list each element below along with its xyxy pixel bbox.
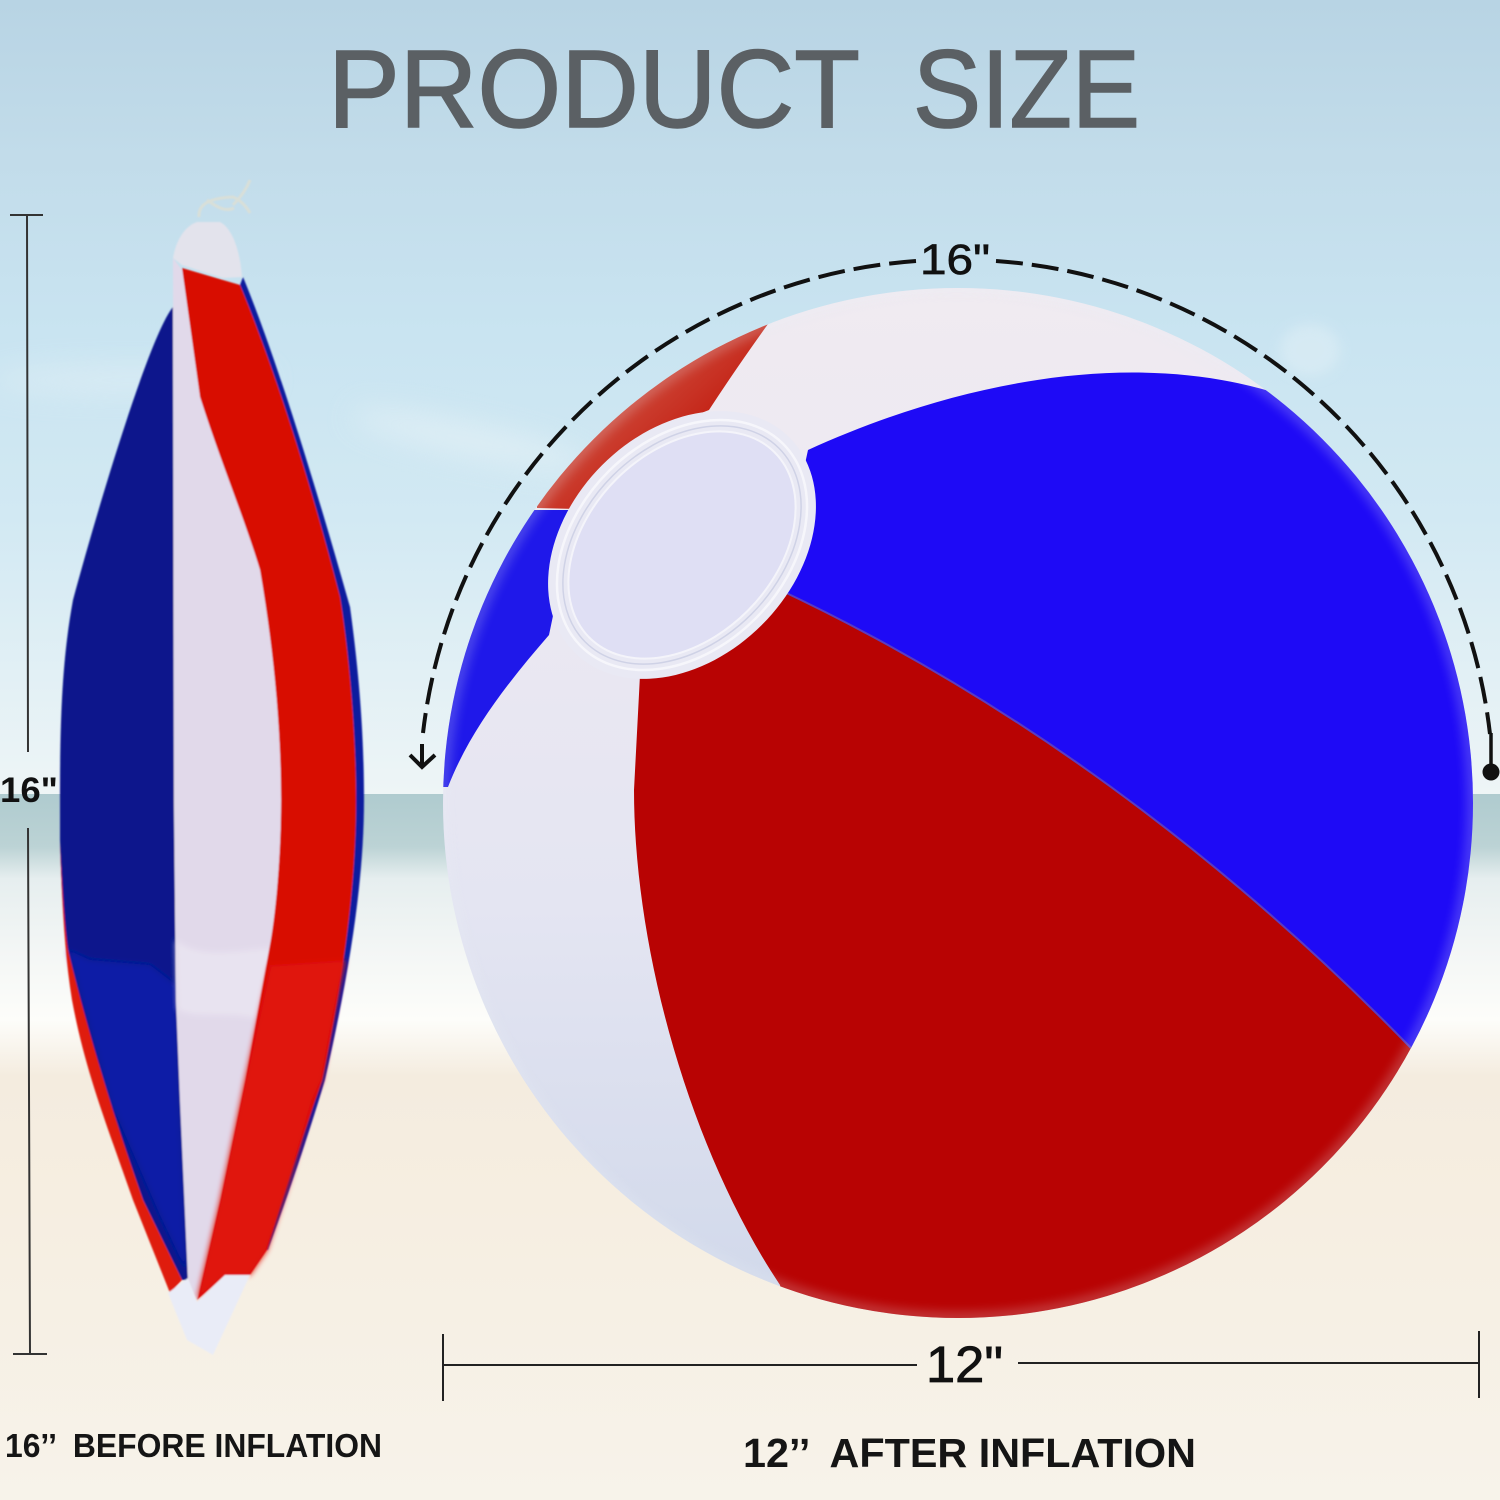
lower white seal <box>168 1275 250 1355</box>
arc end dot <box>1489 733 1493 772</box>
horizontal dimension 12 inch: 12" <box>926 1336 1003 1393</box>
centre white panel <box>173 258 281 1300</box>
red panel lower highlight <box>197 960 345 1300</box>
horizontal dimension 12 inch <box>443 1331 1479 1401</box>
arrowhead <box>410 744 435 767</box>
right red panel <box>182 268 356 1300</box>
caption: before inflation: 16’’ BEFORE INFLATION <box>5 1427 382 1464</box>
title: SIZE <box>913 28 1140 151</box>
navy panel highlight <box>68 950 186 1270</box>
title <box>328 28 1140 151</box>
seam <box>778 589 1411 1048</box>
right blue edge <box>240 277 364 1250</box>
caption: after inflation: 12’’ AFTER INFLATION <box>743 1430 1196 1476</box>
left blue panel <box>443 510 568 787</box>
arc label: 16" <box>920 236 990 284</box>
ball base white <box>440 285 1480 1325</box>
inflated beach ball <box>443 288 1473 1318</box>
valve knot <box>173 222 242 278</box>
large blue panel <box>778 373 1500 1048</box>
left red edge <box>60 840 182 1293</box>
arc dimension 16 inch <box>410 236 1500 780</box>
valve string <box>199 180 250 217</box>
title: PRODUCT <box>328 28 860 151</box>
white panel creases <box>176 940 272 1020</box>
vertical dimension 16 inch <box>0 215 58 1354</box>
deflated beach ball <box>60 180 364 1355</box>
left navy panel <box>60 307 188 1280</box>
valve patch <box>548 412 816 679</box>
vertical dimension 16 inch: 16" <box>0 771 58 810</box>
ball rim highlight <box>443 288 1473 1318</box>
upper left red panel <box>537 324 768 509</box>
large red panel <box>634 594 1411 1318</box>
